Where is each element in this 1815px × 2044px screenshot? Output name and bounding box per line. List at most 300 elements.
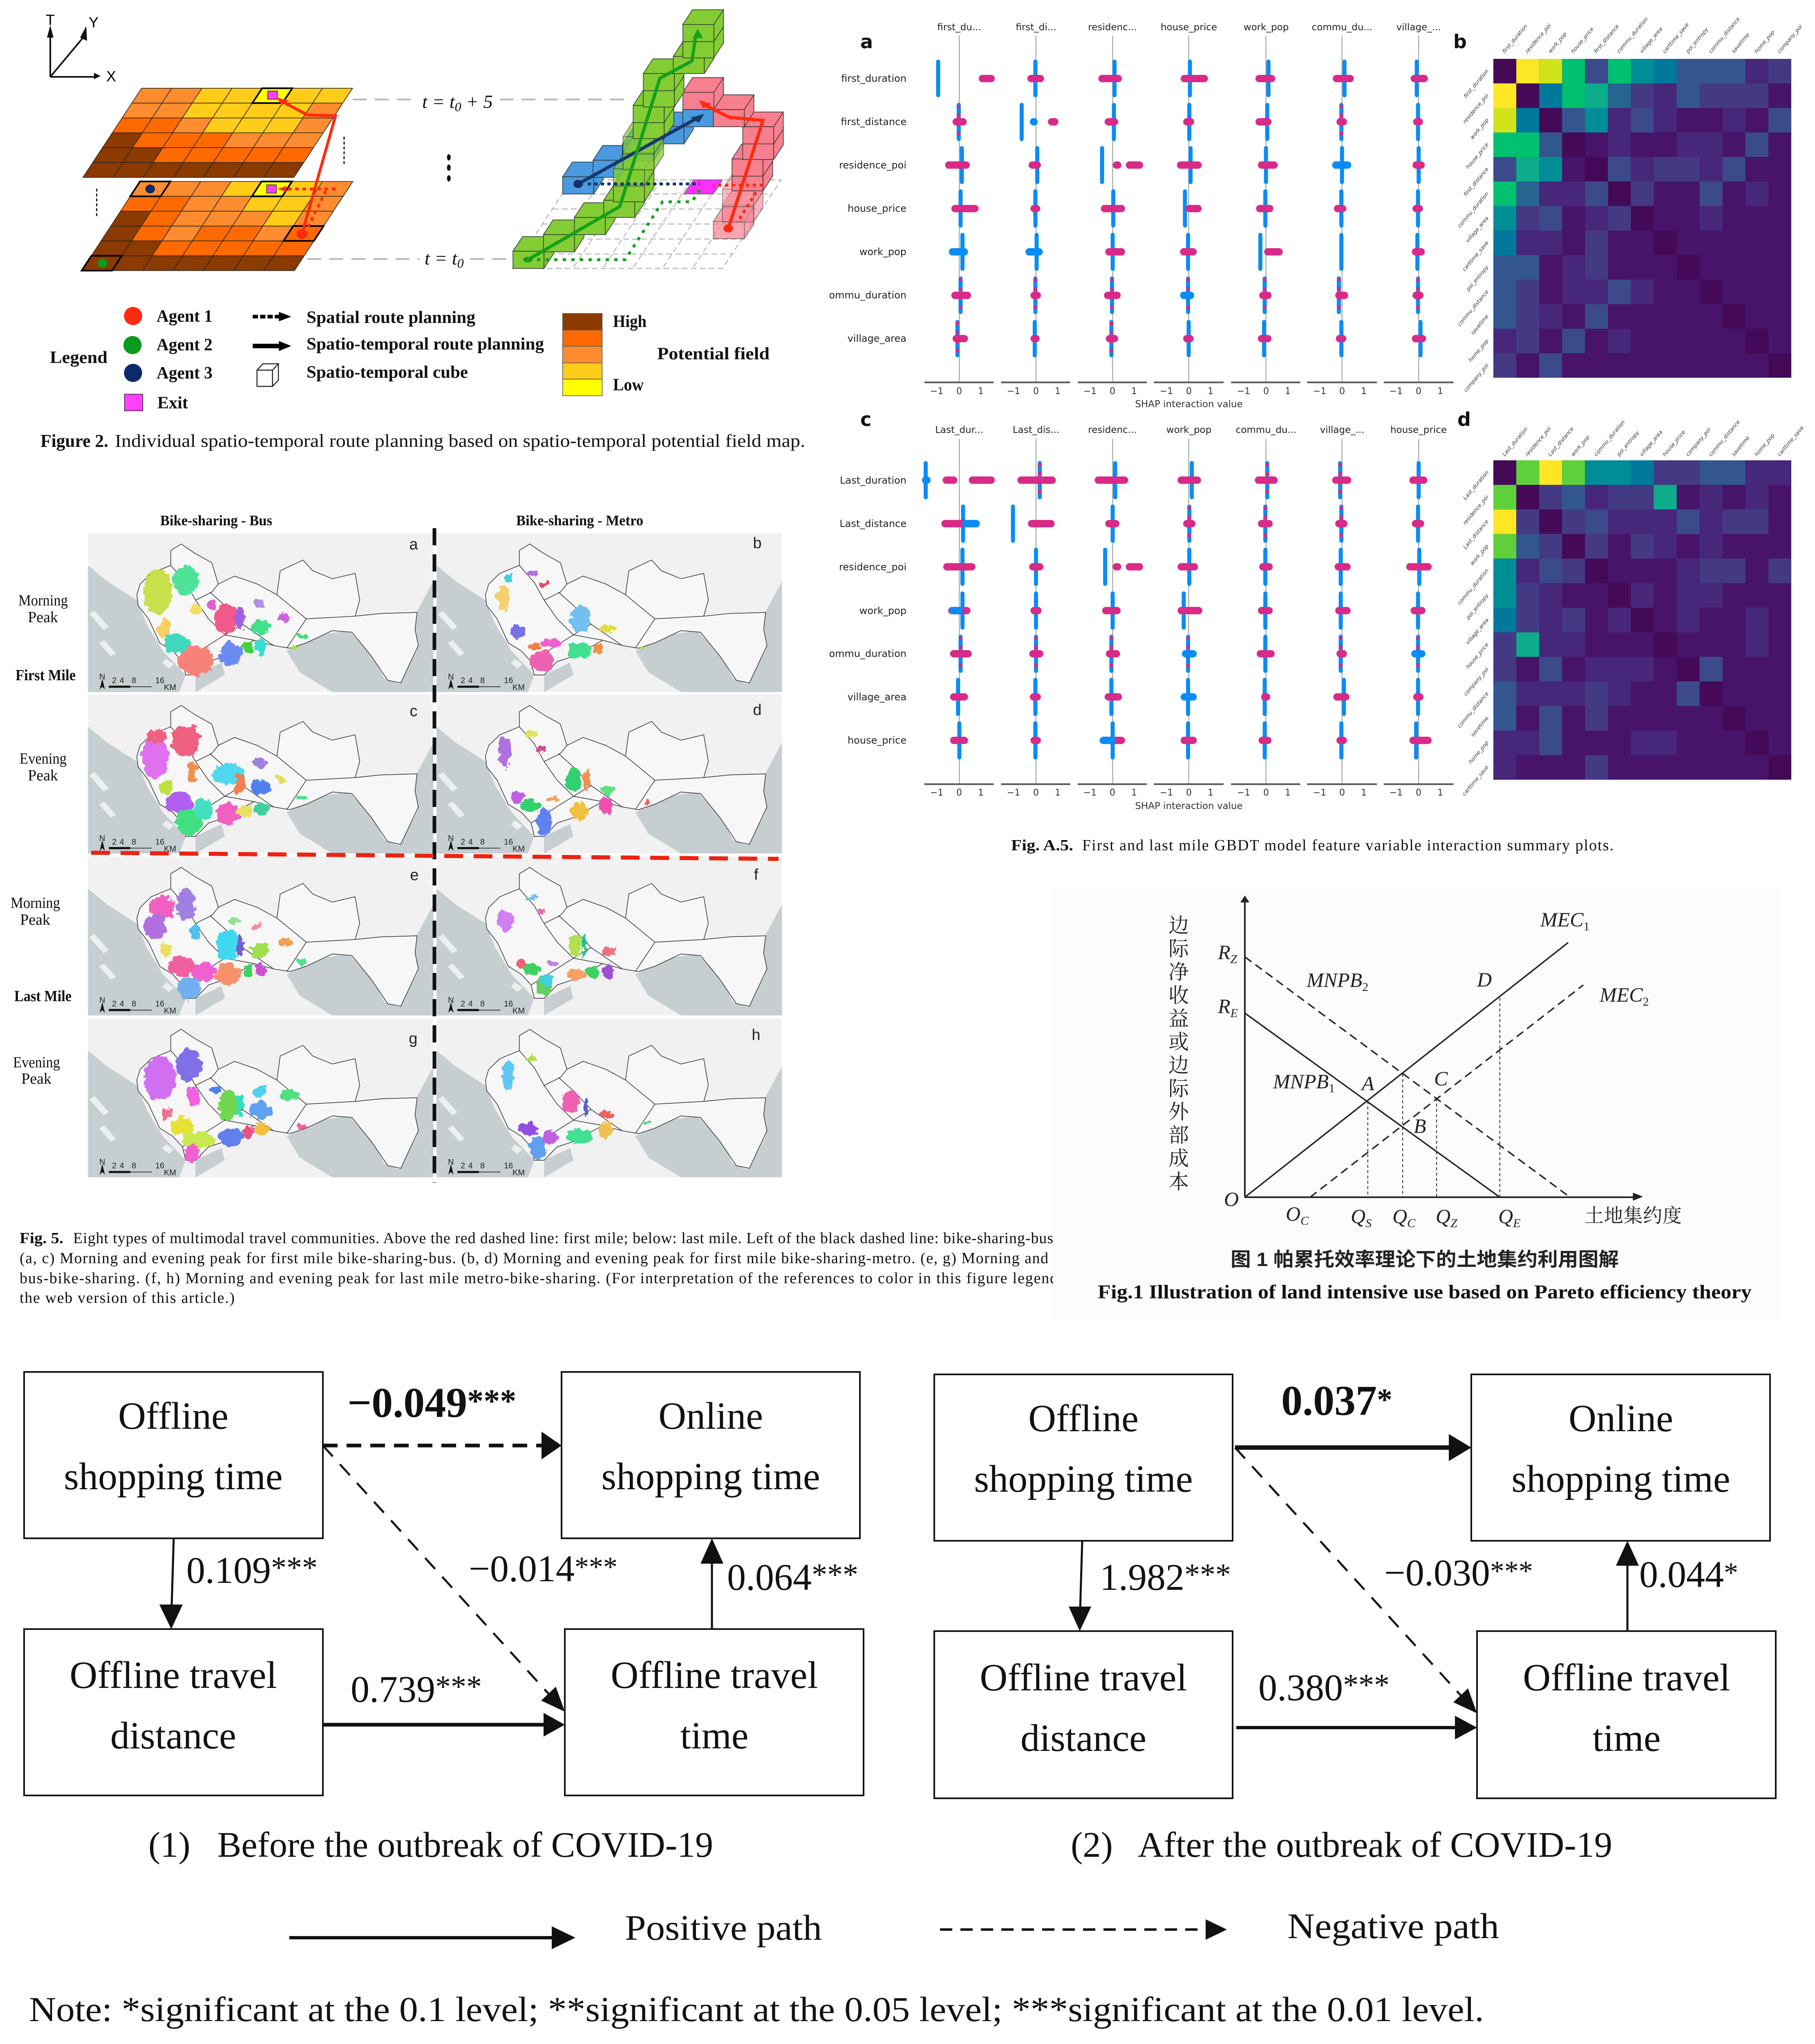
panel a axis ticks: 1	[1055, 386, 1061, 397]
panel letters: e	[410, 867, 419, 884]
panel c axis ticks: 1	[1285, 788, 1291, 798]
row labels: Peak	[28, 767, 58, 784]
panel letters: h	[752, 1026, 761, 1044]
scale bar labels: 2 4	[461, 838, 473, 847]
heatmap b tick labels: home_pop	[1468, 338, 1490, 363]
panel a row labels: first_distance	[841, 116, 906, 128]
scale bar labels	[99, 672, 525, 1177]
panel a axis ticks: −1	[1083, 386, 1097, 397]
path coefficients: 0.064	[727, 1556, 812, 1598]
panel c axis ticks: 0	[1110, 788, 1115, 798]
legend text: Potential field	[657, 345, 770, 363]
scale bar labels: KM	[512, 1006, 525, 1015]
path legend	[289, 1907, 1499, 1949]
panel letters	[860, 31, 1471, 430]
path coefficients: 0.109	[186, 1549, 271, 1591]
box labels: time	[1592, 1717, 1661, 1759]
row labels	[11, 592, 76, 1087]
scale bar labels: KM	[512, 683, 525, 692]
scale bar labels: 16	[504, 838, 513, 847]
panel a headers: commu_du...	[1312, 22, 1372, 33]
path coefficients: −0.049	[347, 1379, 467, 1426]
panel a axis ticks: −1	[1007, 386, 1020, 397]
panel c row labels: Last_distance	[839, 518, 906, 529]
sub captions: (2) After the outbreak of COVID-19	[1071, 1825, 1612, 1865]
heatmap d	[1493, 460, 1791, 780]
legend text: Agent 1	[157, 307, 213, 326]
path coefficients: 0.739	[351, 1668, 435, 1710]
row labels: Peak	[28, 609, 58, 626]
curve and point labels: Q	[1498, 1205, 1513, 1228]
panel a axis ticks	[930, 386, 1443, 410]
curve and point labels: Q	[1392, 1205, 1407, 1228]
heatmap b tick labels: commu_distance	[1708, 16, 1741, 55]
panel a row labels: house_price	[848, 203, 906, 214]
scale bar labels: KM	[164, 845, 176, 854]
panel c axis ticks: 0	[1033, 788, 1039, 798]
scale bar labels: N	[99, 672, 105, 681]
panel a axis ticks: −1	[930, 386, 943, 397]
box labels: Online	[1569, 1397, 1673, 1440]
panel c axis ticks: 0	[1186, 788, 1192, 798]
scale bar labels: 2 4	[461, 1161, 473, 1170]
panel c row labels: Last_duration	[840, 475, 906, 486]
scale bar labels: N	[99, 996, 105, 1005]
SHAP panel c	[924, 425, 1454, 784]
panel c axis ticks: −1	[1390, 788, 1403, 798]
column headers: Bike-sharing - Metro	[516, 512, 643, 529]
arrows: before outbreak	[159, 1432, 723, 1737]
map b clusters	[497, 571, 647, 672]
heatmap b	[1493, 59, 1791, 378]
panel: Fig 1 Pareto efficiency land use diagram	[1053, 887, 1781, 1320]
vertical axis label: 边际净收益或边际外部成本	[1166, 914, 1188, 1194]
box labels: Offline travel	[1523, 1656, 1730, 1699]
panel letters: d	[1457, 408, 1471, 430]
panel a headers	[937, 22, 1441, 33]
time labels: 0	[455, 99, 461, 114]
upper potential field grid	[83, 88, 353, 177]
scale bar labels: 2 4	[112, 676, 125, 685]
panel: Fig A.5 SHAP interaction plots and heatmaps	[824, 16, 1805, 854]
panel a headers: work_pop	[1244, 22, 1289, 33]
box labels	[64, 1395, 1730, 1759]
heatmap b tick labels: savetime	[1470, 314, 1490, 336]
box labels: Offline	[118, 1395, 228, 1437]
curve and point labels: B	[1414, 1114, 1426, 1137]
time labels: 0	[457, 256, 464, 271]
curve and point labels: 2	[1643, 995, 1649, 1009]
panel a axis ticks: 1	[1437, 386, 1443, 397]
scale bar labels: 16	[155, 1000, 164, 1009]
panel letters: c	[860, 408, 871, 430]
panel a axis ticks: 1	[1131, 386, 1137, 397]
legend text: Agent 3	[157, 364, 213, 383]
box labels: Offline	[1028, 1397, 1139, 1440]
scale bar labels: N	[448, 1158, 454, 1167]
scale bar labels: 16	[155, 838, 164, 847]
panel letters: d	[753, 702, 762, 719]
box labels: distance	[1021, 1717, 1146, 1759]
map h clusters	[502, 1056, 652, 1160]
legend text: High	[613, 312, 647, 331]
heatmap b tick labels: savetime	[1731, 32, 1751, 55]
path coefficients: 1.982	[1100, 1556, 1184, 1598]
heatmap b tick labels: first_distance	[1593, 23, 1620, 55]
curve and point labels: R	[1218, 995, 1231, 1018]
spatio-temporal cube stacks and routes	[513, 10, 783, 269]
panel c axis ticks: −1	[1160, 788, 1173, 798]
panel letters: b	[1453, 31, 1467, 53]
box labels: shopping time	[1511, 1458, 1730, 1500]
path coefficients: −0.030	[1384, 1552, 1490, 1594]
legend text: Spatio-temporal route planning	[307, 335, 544, 354]
caption: Figure 2: Figure 2.	[40, 431, 108, 451]
scale bar labels: 16	[504, 1000, 513, 1009]
scale bar labels: 16	[155, 1161, 164, 1170]
map d clusters	[499, 731, 651, 835]
panel a axis ticks: −1	[1160, 386, 1173, 397]
heatmap b tick labels: carttime_save	[1662, 22, 1690, 55]
panel c axis ticks: 1	[1208, 788, 1213, 798]
panel letters: a	[409, 536, 418, 553]
scale bar labels: 8	[132, 676, 136, 685]
panel: Figure 3 direct impact paths	[20, 1372, 1792, 2044]
heatmap d tick labels: residence_poi	[1524, 426, 1553, 458]
caption: Fig A.5: First and last mile GBDT model feature variable interaction summary plots.	[1082, 837, 1614, 854]
black vertical dashed divider	[432, 528, 436, 1183]
column headers	[160, 512, 643, 529]
row labels: Last Mile	[14, 988, 72, 1005]
heatmap d tick labels: savetime	[1731, 435, 1751, 458]
path coefficients: ***	[812, 1558, 858, 1592]
panel a axis ticks: −1	[1237, 386, 1250, 397]
heatmap d tick labels: home_pop	[1754, 433, 1776, 458]
heatmap b tick labels: first_duration	[1463, 68, 1490, 99]
scale bar labels: 8	[480, 1000, 485, 1009]
panel a row labels: first_duration	[841, 73, 906, 84]
legend symbols	[123, 307, 602, 411]
box labels: shopping time	[601, 1455, 820, 1498]
caption: Fig 5: Eight types of multimodal travel communities. Above the red dashed line: first mile; below: last mile. Left of the black dashed line: bike-sharing-bus	[73, 1230, 1053, 1247]
panel c axis ticks: 0	[1263, 788, 1269, 798]
time labels: t = t	[422, 91, 455, 112]
panel c headers: Last_dis...	[1013, 425, 1059, 435]
vertical ellipsis	[447, 154, 451, 182]
significance note: Note: *significant at the 0.1 level; **significant at the 0.05 level; ***significant at the 0.01 level.	[29, 1990, 1484, 2029]
curve and point labels: C	[1407, 1217, 1416, 1230]
box labels: Online	[658, 1395, 763, 1437]
panel c axis ticks: 1	[978, 788, 984, 798]
column headers: Bike-sharing - Bus	[160, 512, 272, 529]
heatmap d tick labels: commu_distance	[1457, 691, 1490, 729]
legend text: Spatio-temporal cube	[307, 363, 468, 382]
path coefficients: ***	[575, 1551, 618, 1583]
x axis label: 土地集约度	[1584, 1206, 1682, 1227]
row labels: First Mile	[16, 667, 76, 684]
scale bar labels: 8	[480, 676, 485, 685]
panel c axis ticks	[930, 788, 1443, 811]
heatmap b tick labels: work_pop	[1469, 117, 1490, 141]
panel c headers: work_pop	[1166, 425, 1211, 435]
scale bar labels: N	[448, 996, 454, 1005]
heatmap d tick labels: Last_duration	[1502, 426, 1529, 458]
panel c axis ticks: 1	[1361, 788, 1367, 798]
heatmap b tick labels: first_duration	[1502, 23, 1529, 55]
scale bar labels: 16	[504, 1161, 513, 1170]
heatmap b tick labels: commu_duration	[1457, 191, 1490, 229]
heatmap b tick labels: company_poi	[1777, 24, 1804, 55]
path coefficients	[186, 1377, 1738, 1710]
path coefficients: −0.014	[469, 1548, 575, 1589]
curve and point labels: 2	[1362, 980, 1368, 994]
curve and point labels: Q	[1436, 1205, 1450, 1228]
scale bar labels: KM	[164, 683, 176, 692]
panel a row labels: commu_duration	[824, 289, 906, 301]
curve and point labels	[1217, 908, 1649, 1230]
heatmap d tick labels: poi_entropy	[1465, 593, 1490, 621]
caption: Figure 2: Individual spatio-temporal route planning based on spatio-temporal potential field map.	[115, 431, 805, 451]
heatmap d tick labels: savetime	[1470, 715, 1490, 738]
panel c row labels: residence_poi	[839, 561, 906, 573]
arrows: after outbreak	[1069, 1434, 1639, 1739]
panel a row labels: residence_poi	[839, 159, 906, 171]
path legend: Negative path	[1287, 1907, 1499, 1946]
panel c headers: house_price	[1390, 425, 1447, 435]
row labels: Evening	[20, 750, 67, 767]
panel c axis ticks: −1	[930, 788, 943, 798]
panel a axis ticks: SHAP interaction value	[1135, 399, 1243, 410]
heatmap d tick labels: home_pop	[1468, 740, 1490, 765]
scale bar labels: 2 4	[112, 838, 125, 847]
scale bar labels: N	[448, 672, 454, 681]
curve and point labels: E	[1230, 1006, 1238, 1020]
curve and point labels: 1	[1584, 920, 1590, 933]
heatmap b tick labels: house_price	[1570, 26, 1595, 55]
heatmap d tick labels: house_price	[1465, 642, 1490, 670]
time labels	[422, 91, 493, 271]
panel c row labels	[824, 475, 906, 746]
panel c axis ticks: −1	[1313, 788, 1326, 798]
scale bar labels: 16	[504, 676, 513, 685]
panel c row labels: village_area	[848, 691, 906, 703]
heatmap d tick labels: village_area	[1639, 429, 1664, 458]
panel c headers: commu_du...	[1236, 425, 1296, 435]
scale bar labels: 8	[480, 1161, 485, 1170]
heatmap b tick labels: poi_entropy	[1685, 27, 1710, 55]
panel a axis ticks: −1	[1313, 386, 1326, 397]
scale bar labels: 16	[155, 676, 164, 685]
legend text: Legend	[50, 348, 107, 367]
heatmap b tick labels: residence_poi	[1524, 22, 1553, 55]
map e clusters	[143, 889, 306, 1000]
panel a axis ticks: 1	[978, 386, 984, 397]
panel: Fig 5 multimodal travel community maps	[11, 512, 1058, 1307]
heatmap b tick labels: carttime_save	[1461, 240, 1490, 273]
box labels: time	[680, 1715, 749, 1757]
scale bar labels: N	[448, 834, 454, 843]
heatmap d tick labels: work_pop	[1469, 543, 1490, 567]
box labels: Offline travel	[611, 1654, 818, 1697]
SHAP panel a	[924, 22, 1454, 382]
panel: Figure 2 spatio-temporal route planning	[40, 10, 805, 451]
panel c axis ticks: 0	[1416, 788, 1421, 798]
heatmap b tick labels: village_area	[1639, 26, 1664, 55]
panel a axis ticks: 0	[1110, 386, 1115, 397]
heatmap d tick labels: work_pop	[1570, 434, 1591, 458]
box labels: distance	[110, 1715, 236, 1757]
legend text: Low	[613, 376, 644, 394]
row labels: Morning	[18, 592, 68, 609]
heatmap d tick labels: poi_entropy	[1616, 430, 1641, 458]
panel letters: g	[409, 1030, 418, 1047]
sub captions: (1) Before the outbreak of COVID-19	[148, 1825, 713, 1865]
scale bar labels: N	[99, 834, 105, 843]
heatmap d tick labels: commu_duration	[1593, 419, 1627, 458]
panel c axis ticks: −1	[1007, 788, 1020, 798]
heatmap d tick labels: commu_distance	[1708, 419, 1741, 458]
panel a axis ticks: 0	[1186, 386, 1192, 397]
box labels: shopping time	[974, 1458, 1193, 1500]
caption: Fig 5: bus-bike-sharing. (f, h) Morning and evening peak for last mile metro-bike-sharing. (For interpretation of the references to color in this figure legend	[20, 1270, 1058, 1287]
panel a axis ticks: −1	[1390, 386, 1403, 397]
curve and point labels: R	[1218, 941, 1231, 964]
path coefficients: 0.037	[1281, 1377, 1377, 1424]
curve and point labels: Q	[1351, 1205, 1365, 1228]
box labels: Offline travel	[69, 1654, 277, 1697]
caption: Fig 5: (a, c) Morning and evening peak for first mile bike-sharing-bus. (b, d) Morning and evening peak for first mile bike-sharing-metro. (e, g) Morning and	[20, 1250, 1048, 1267]
scale bar labels: 8	[132, 1161, 136, 1170]
panel c axis ticks: 1	[1055, 788, 1061, 798]
curve and point labels: MEC	[1540, 908, 1584, 931]
path coefficients: ***	[467, 1383, 516, 1419]
curve and point labels: Z	[1450, 1217, 1457, 1230]
heatmap b tick labels	[1457, 16, 1804, 394]
panel a axis ticks: 0	[956, 386, 962, 397]
curve and point labels: D	[1477, 968, 1492, 991]
heatmap b tick labels: commu_duration	[1616, 16, 1649, 55]
heatmap b tick labels: residence_poi	[1462, 93, 1490, 125]
path coefficients: ***	[1184, 1558, 1231, 1592]
path coefficients: 0.044	[1639, 1553, 1724, 1595]
axes T Y X: T	[46, 11, 55, 28]
panel a axis ticks: 0	[1033, 386, 1039, 397]
scale bar labels: KM	[512, 845, 525, 854]
panel a axis ticks: 1	[1285, 386, 1291, 397]
path coefficients: 0.380	[1258, 1667, 1343, 1708]
panel a headers: residenc...	[1088, 22, 1137, 33]
heatmap b tick labels: first_distance	[1463, 166, 1490, 197]
panel a axis ticks: 1	[1361, 386, 1367, 397]
map a clusters	[143, 565, 307, 675]
heatmap d tick labels: carttime_save	[1777, 425, 1805, 458]
legend text: Agent 2	[157, 336, 213, 354]
scale bar labels: N	[99, 1158, 105, 1167]
panel a headers: house_price	[1161, 22, 1217, 33]
heatmap b tick labels: house_price	[1465, 142, 1490, 170]
panel c row labels: commu_duration	[824, 648, 906, 659]
axes T Y X	[46, 11, 116, 85]
path coefficients: ***	[1343, 1668, 1390, 1702]
heatmap b tick labels: work_pop	[1547, 31, 1568, 55]
scale bar labels: 2 4	[112, 1000, 125, 1009]
scale bar labels: KM	[164, 1168, 176, 1177]
panel c headers: residenc...	[1088, 425, 1137, 435]
panel c row labels: work_pop	[859, 605, 906, 616]
panel c axis ticks: −1	[1237, 788, 1250, 798]
path coefficients: *	[1724, 1557, 1738, 1589]
heatmap b tick labels: home_pop	[1754, 29, 1776, 55]
path coefficients: ***	[435, 1670, 482, 1704]
heatmap d tick labels: Last_duration	[1462, 470, 1490, 501]
row labels: Peak	[21, 1070, 51, 1087]
axes T Y X: X	[106, 68, 116, 85]
scale bar labels: 2 4	[461, 676, 473, 685]
curve and point labels: C	[1434, 1067, 1448, 1090]
scale bar labels: 2 4	[461, 1000, 473, 1009]
panel a axis ticks: 0	[1339, 386, 1345, 397]
curve and point labels: 1	[1329, 1082, 1335, 1095]
map g clusters	[143, 1049, 306, 1161]
boxes	[24, 1372, 1776, 1798]
heatmap d tick labels	[1457, 419, 1805, 797]
panel c row labels: house_price	[848, 735, 906, 746]
heatmap b tick labels: company_poi	[1463, 363, 1490, 394]
path legend: Positive path	[625, 1908, 822, 1948]
heatmap d tick labels: village_area	[1465, 617, 1490, 646]
heatmap d tick labels: residence_poi	[1462, 494, 1490, 526]
panel c axis ticks: 0	[956, 788, 962, 798]
panel c headers: Last_dur...	[935, 425, 983, 435]
curve and point labels: Z	[1231, 953, 1238, 966]
row labels: Morning	[11, 894, 60, 912]
curve and point labels: MEC	[1600, 983, 1643, 1006]
box labels: Offline travel	[980, 1656, 1187, 1699]
scale bar labels: 8	[480, 838, 485, 847]
path coefficients: ***	[1490, 1555, 1533, 1587]
map base panels	[88, 533, 782, 1177]
curve and point labels: O	[1286, 1202, 1300, 1225]
panel a axis ticks: 0	[1263, 386, 1269, 397]
box labels: shopping time	[64, 1455, 283, 1498]
heatmap b tick labels: poi_entropy	[1465, 264, 1490, 293]
panel c axis ticks: 1	[1131, 788, 1137, 798]
panel letters: b	[753, 535, 762, 552]
row labels: Evening	[13, 1054, 60, 1071]
heatmap d tick labels: Last_distance	[1547, 426, 1575, 458]
caption: Fig A.5: Fig. A.5.	[1011, 837, 1073, 854]
curve and point labels: A	[1361, 1072, 1374, 1095]
sub captions	[148, 1825, 1612, 1865]
panel c axis ticks: 0	[1339, 788, 1345, 798]
panel a row labels	[824, 73, 906, 344]
heatmap d tick labels: company_poi	[1463, 666, 1490, 697]
curve and point labels: E	[1513, 1217, 1520, 1230]
panel c headers: village_...	[1320, 425, 1365, 435]
curve and point labels: MNPB	[1307, 968, 1362, 991]
curve and point labels: O	[1224, 1188, 1239, 1210]
panel a row labels: village_area	[848, 333, 906, 344]
heatmap d tick labels: carttime_save	[1461, 764, 1490, 797]
legend text: Spatial route planning	[307, 308, 475, 327]
panel c axis ticks: 1	[1437, 788, 1443, 798]
heatmap d tick labels: company_poi	[1685, 427, 1712, 458]
panel letters: f	[754, 866, 759, 883]
caption Chinese: 图 1 帕累托效率理论下的土地集约利用图解	[1231, 1248, 1619, 1270]
curve and point labels: MNPB	[1273, 1070, 1329, 1093]
scale bar labels: KM	[164, 1006, 176, 1015]
panel letters	[409, 535, 762, 1047]
